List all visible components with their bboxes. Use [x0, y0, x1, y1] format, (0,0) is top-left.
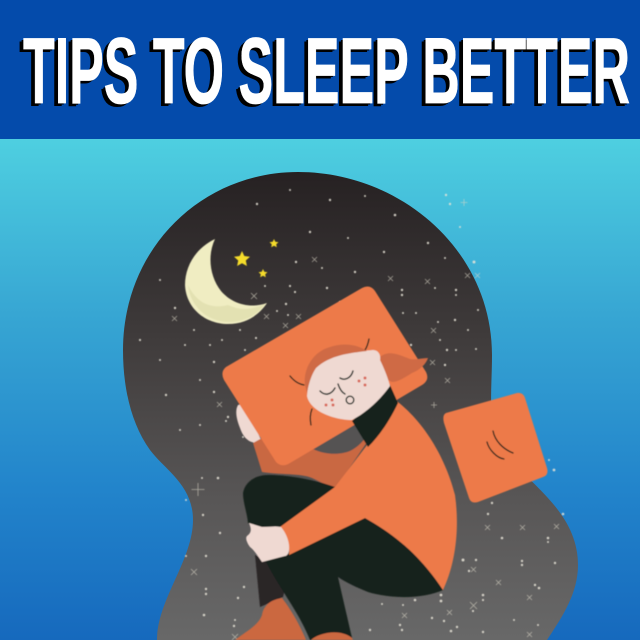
front foot	[311, 632, 353, 640]
front leg	[265, 518, 443, 640]
arm behind head	[236, 405, 262, 443]
ponytail	[380, 353, 428, 382]
hand	[246, 523, 289, 562]
gray gap under pillow	[313, 420, 367, 454]
scarf	[352, 385, 398, 447]
rear leg	[255, 555, 290, 607]
star field	[139, 189, 564, 633]
night sky blob	[123, 172, 578, 640]
back of shirt	[253, 415, 372, 489]
closed eyes, nose and mouth	[320, 371, 354, 404]
raised knee	[243, 475, 335, 528]
illustration of sleeping person	[185, 239, 548, 640]
sky background	[0, 139, 640, 640]
face	[305, 344, 390, 420]
pillow creases	[290, 339, 369, 425]
rear foot	[235, 598, 306, 640]
twinkle stars	[172, 199, 559, 640]
header banner	[0, 0, 640, 139]
freckles	[324, 376, 366, 406]
small pillow	[443, 393, 548, 502]
orange torso and arm	[280, 395, 457, 590]
yellow stars	[234, 239, 278, 277]
crescent moon	[185, 239, 267, 324]
main pillow	[222, 287, 427, 465]
hair	[305, 344, 367, 393]
small pillow creases	[487, 431, 513, 459]
